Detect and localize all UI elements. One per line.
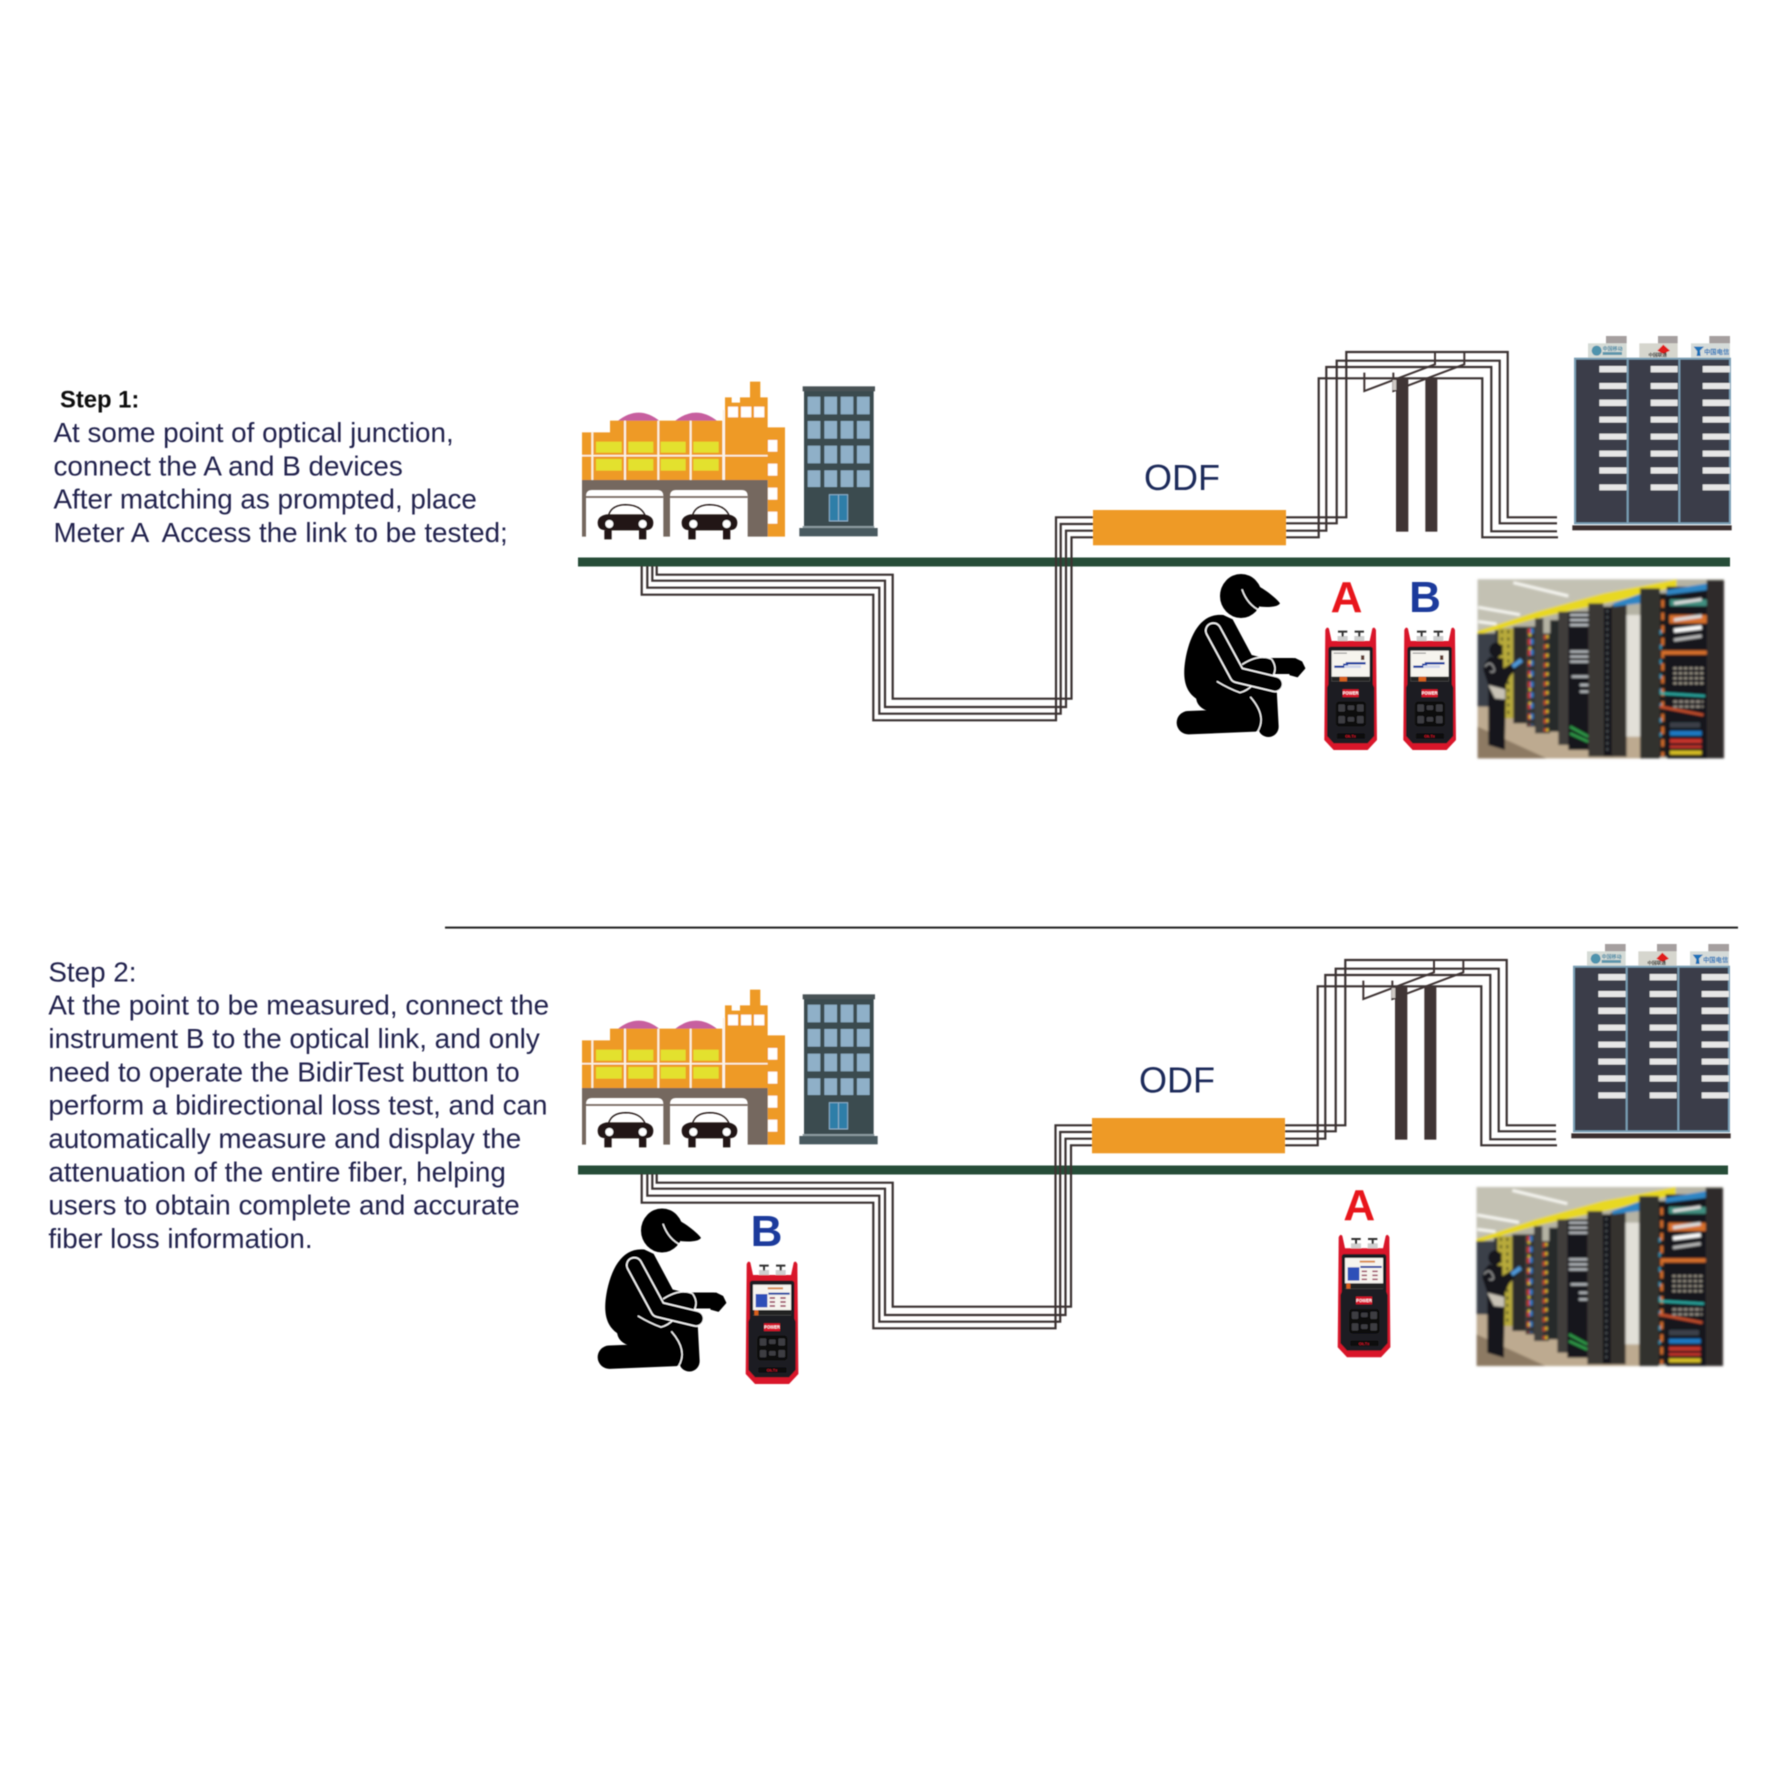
device: meter A [1338,1235,1390,1357]
text block: step 2 instructions: fiber loss information. [48,1223,313,1254]
device: meter B [746,1262,798,1384]
icon: utility poles [1363,960,1463,1140]
text block: step 2 instructions: need to operate the BidirTest button to [48,1056,520,1087]
panel: step 2 text [48,956,549,1254]
device: meter B [1403,628,1456,750]
icon: carrier data centre [1572,336,1732,530]
fiber bundle: aerial from ODF to data centre [1285,960,1557,1145]
label: A: A [1343,1181,1375,1230]
text block: step 2 instructions: At the point to be measured, connect the [48,990,549,1021]
label: B: B [1409,573,1441,622]
fiber bundle: underground from building to ODF [642,517,1093,720]
text block: step 2 instructions: attenuation of the entire fiber, helping [48,1156,506,1187]
divider line [445,927,1738,929]
ODF label: ODF [1139,1059,1215,1100]
label: B: B [751,1207,782,1256]
photo: server room [1478,579,1724,758]
icon: office building [799,994,878,1144]
text block: step 2 instructions: users to obtain complete and accurate [48,1190,520,1221]
heading: step 2: Step 2: [48,956,136,987]
fiber bundle: underground from building to ODF [642,1125,1092,1328]
icon: factory with garage [582,382,785,539]
ground line [578,1166,1728,1174]
heading: step 1: Step 1: [60,387,139,414]
photo: server room [1477,1187,1723,1366]
panel: step 2 diagram [578,944,1731,1384]
text block: step 1 instructions: At some point of optical junction, [54,417,454,448]
panel: step 1 diagram [578,336,1732,758]
label: A: A [1331,573,1362,622]
text block: step 1 instructions: Meter A Access the link to be tested; [54,517,508,548]
text block: step 1 instructions [54,417,508,548]
panel: step 1 text [54,387,508,548]
icon: kneeling technician [1184,574,1305,732]
text block: step 1 instructions: After matching as prompted, place [54,484,477,515]
text block: step 2 instructions: perform a bidirectional loss test, and can [48,1090,547,1121]
text block: step 1 instructions: connect the A and B devices [54,450,403,481]
device: meter A [1324,628,1377,750]
icon: utility poles [1364,352,1464,532]
icon: office building [799,386,878,536]
ODF label: ODF [1144,457,1220,498]
icon: factory with garage [582,990,785,1147]
text block: step 2 instructions: instrument B to the optical link, and only [48,1023,540,1054]
text block: step 2 instructions [48,990,549,1254]
ODF box [1092,1118,1285,1153]
text block: step 2 instructions: automatically measure and display the [48,1123,521,1154]
ground line [578,558,1730,566]
ODF box [1093,510,1286,545]
icon: carrier data centre [1571,944,1731,1138]
fiber bundle: aerial from ODF to data centre [1286,352,1558,537]
icon: kneeling technician [605,1208,726,1366]
